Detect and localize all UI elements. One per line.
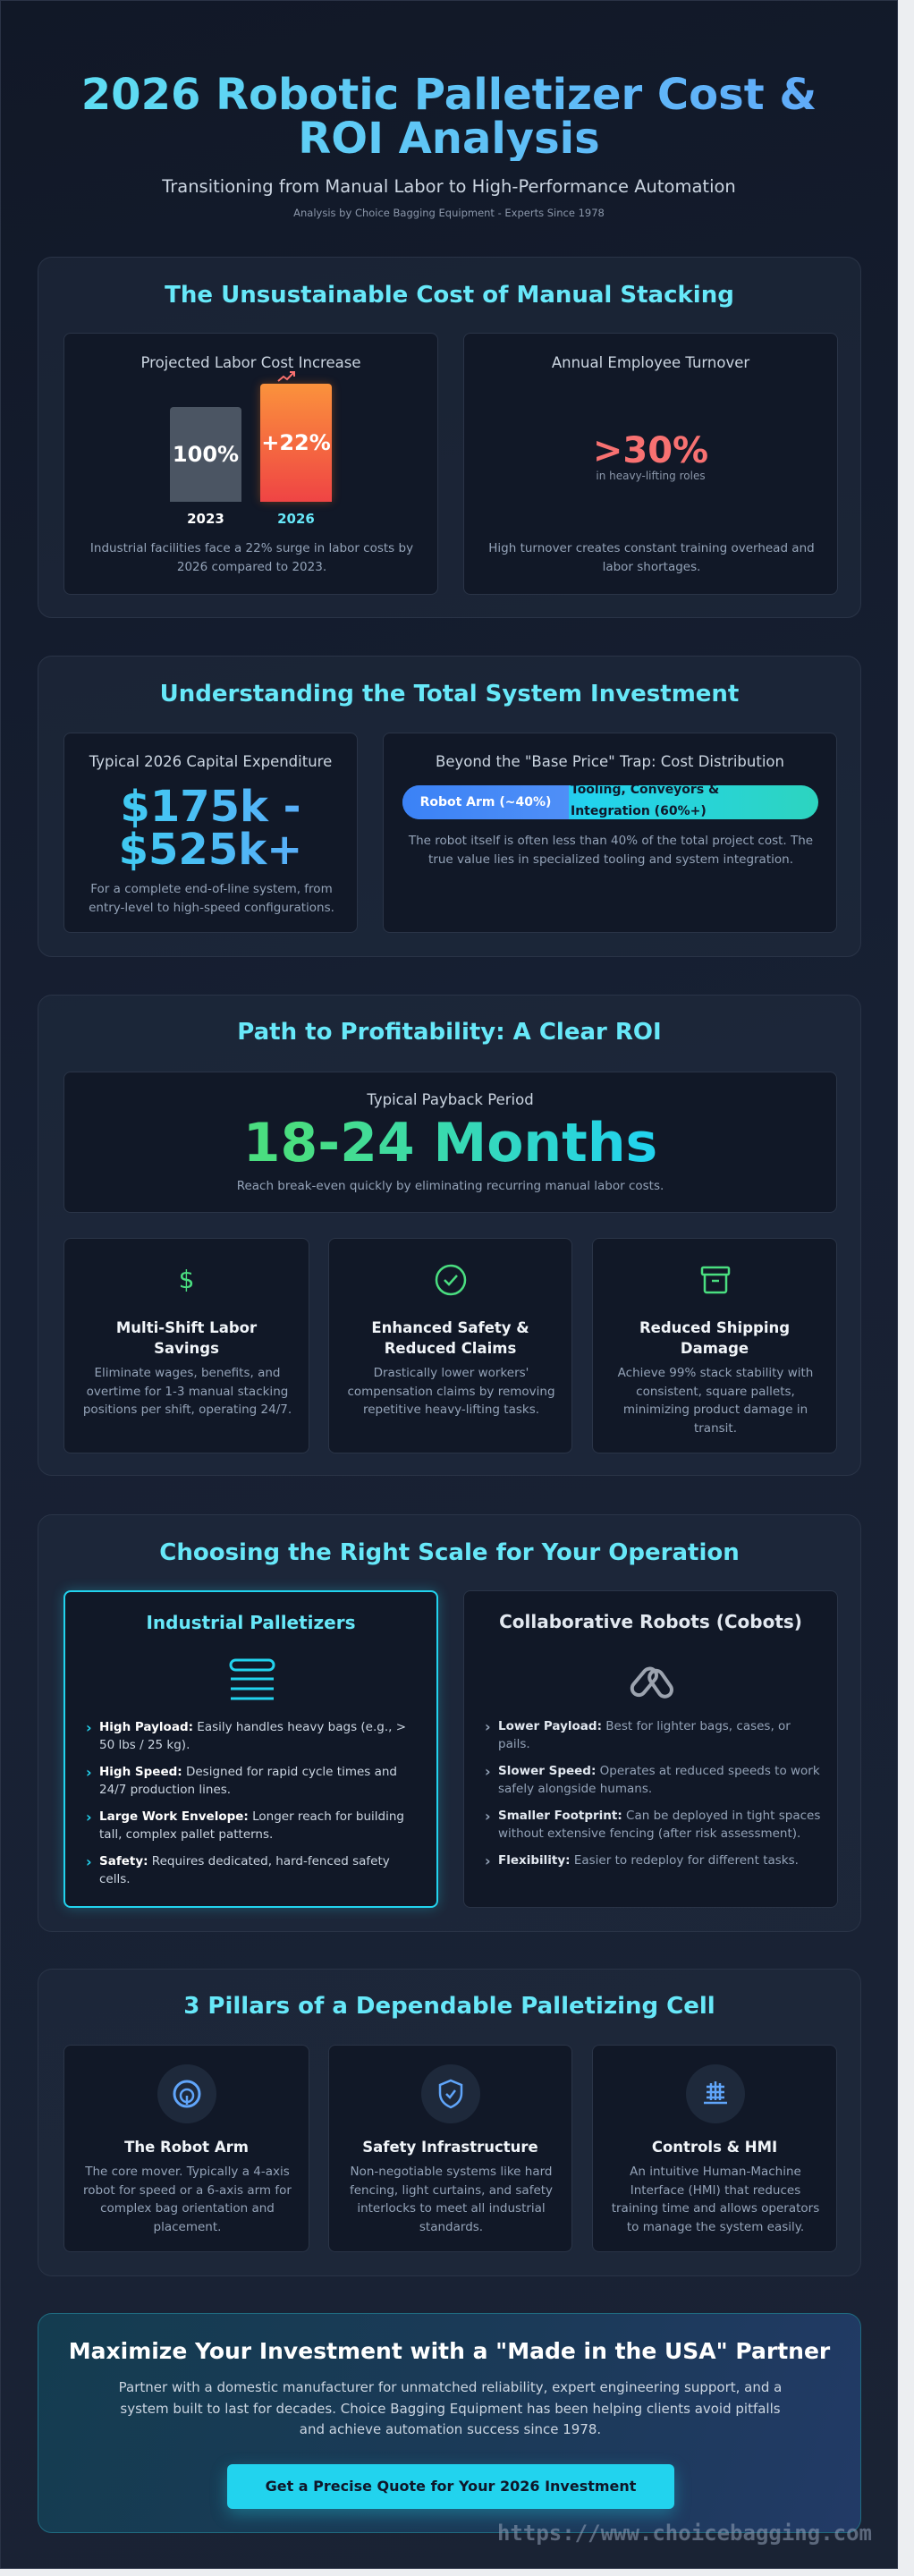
feature list: Smaller Footprint: Can be deployed in tight spaces without extensive fencing (after risk assessment).	[498, 1809, 820, 1841]
panel: total system investment	[38, 656, 861, 957]
panel: cost of manual stacking	[38, 257, 861, 618]
CTA paragraph: Partner with a domestic manufacturer for unmatched reliability, expert engineering support, and a system built to last for decades. Choice Bagging Equipment has been helping clients avoid pitfalls and achieve automation success since 1978.	[119, 2379, 782, 2437]
price range	[64, 785, 357, 871]
segment: tooling: Tooling, Conveyors & Integration (60%+)	[571, 783, 719, 818]
year labels	[187, 511, 315, 527]
segment: robot arm: Robot Arm (~40%)	[420, 795, 551, 809]
year labels: 2023	[187, 511, 224, 527]
stat caption: in heavy-lifting roles	[596, 470, 706, 482]
icon: robot arm	[157, 2064, 216, 2123]
heading: Understanding the Total System Investment	[160, 681, 739, 708]
bar 2026	[260, 384, 332, 502]
card: controls	[592, 2045, 837, 2252]
icon: shield	[421, 2064, 480, 2123]
icon: check circle	[435, 1265, 467, 1295]
card title: Projected Labor Cost Increase	[141, 354, 360, 371]
bar 2023: 100%	[173, 442, 239, 467]
description: Reach break-even quickly by eliminating recurring manual labor costs.	[237, 1179, 664, 1193]
feature list	[487, 1719, 820, 1868]
bar 2023	[170, 407, 241, 502]
heading: The Unsustainable Cost of Manual Stacking	[165, 282, 734, 309]
card: labor cost chart	[63, 333, 438, 595]
card: shipping damage	[592, 1238, 837, 1453]
card: safety infrastructure	[328, 2045, 572, 2252]
CTA button: Get a Precise Quote for Your 2026 Investment	[266, 2478, 636, 2495]
feature list: Lower Payload: Best for lighter bags, cases, or pails.	[498, 1719, 791, 1751]
card title: Typical 2026 Capital Expenditure	[89, 753, 332, 770]
stacked bar	[402, 785, 818, 819]
card: capex	[63, 733, 358, 933]
icon: cobot arm	[630, 1667, 673, 1699]
card: cost distribution	[383, 733, 837, 933]
icon: dollar: $	[179, 1265, 194, 1294]
icon: archive box	[701, 1267, 730, 1293]
heading: Choosing the Right Scale for Your Operation	[159, 1539, 740, 1566]
CTA panel	[38, 2313, 861, 2533]
subtitle: Transitioning from Manual Labor to High-Performance Automation	[162, 176, 736, 197]
watermark url: https://www.choicebagging.com	[497, 2521, 872, 2546]
description: Drastically lower workers' compensation claims by removing repetitive heavy-lifting tasks.	[347, 1366, 555, 1417]
card: robot arm	[63, 2045, 309, 2252]
bar 2026: +22%	[261, 430, 331, 455]
title: Controls & HMI	[652, 2139, 777, 2156]
title: Damage	[681, 1340, 749, 1357]
feature list	[88, 1720, 406, 1885]
title: Reduced Shipping	[639, 1319, 790, 1336]
card: payback	[63, 1072, 837, 1213]
icon: trend arrow	[277, 371, 295, 382]
card: industrial palletizers	[63, 1590, 438, 1908]
title: Safety Infrastructure	[362, 2139, 538, 2156]
panel: choosing scale	[38, 1514, 861, 1932]
segment: robot arm	[402, 785, 569, 819]
heading: Path to Profitability: A Clear ROI	[237, 1019, 662, 1046]
title: ROI Analysis	[298, 114, 600, 164]
title: Savings	[154, 1340, 219, 1357]
description: Achieve 99% stack stability with consistent, square pallets, minimizing product damage in transit.	[618, 1366, 813, 1435]
card title: Beyond the "Base Price" Trap: Cost Distribution	[436, 753, 784, 770]
card: turnover	[463, 333, 838, 595]
title: 2026 Robotic Palletizer Cost &	[81, 70, 817, 120]
feature list: Large Work Envelope: Longer reach for building tall, complex pallet patterns.	[99, 1809, 404, 1841]
description: High turnover creates constant training overhead and labor shortages.	[488, 541, 815, 574]
payback stat: 18-24 Months	[243, 1112, 657, 1174]
title	[116, 1319, 258, 1357]
description: Industrial facilities face a 22% surge in labor costs by 2026 compared to 2023.	[90, 541, 413, 574]
description: Eliminate wages, benefits, and overtime for 1-3 manual stacking positions per shift, operating 24/7.	[83, 1366, 292, 1417]
card title: Typical Payback Period	[367, 1091, 534, 1108]
panel: 3 pillars	[38, 1969, 861, 2276]
price range: $525k+	[119, 825, 302, 875]
feature list: Slower Speed: Operates at reduced speeds to work safely alongside humans.	[498, 1764, 820, 1796]
description: An intuitive Human-Machine Interface (HMI) that reduces training time and allows operators to manage the system easily.	[612, 2165, 819, 2234]
payback stat	[64, 1112, 836, 1174]
title	[371, 1319, 529, 1357]
heading: 3 Pillars of a Dependable Palletizing Cell	[183, 1993, 715, 2020]
title: Multi-Shift Labor	[116, 1319, 257, 1336]
icon: stack	[229, 1658, 275, 1699]
description: Non-negotiable systems like hard fencing, light curtains, and safety interlocks to meet all industrial standards.	[350, 2165, 553, 2234]
feature list: High Payload: Easily handles heavy bags (e.g., > 50 lbs / 25 kg).	[99, 1720, 406, 1751]
year labels: 2026	[277, 511, 315, 527]
CTA button	[227, 2464, 674, 2509]
CTA heading: Maximize Your Investment with a "Made in the USA" Partner	[69, 2338, 830, 2364]
card title: Collaborative Robots (Cobots)	[499, 1611, 802, 1632]
feature list: Flexibility: Easier to redeploy for different tasks.	[498, 1853, 799, 1868]
title	[639, 1319, 790, 1357]
card: labor savings	[63, 1238, 309, 1453]
price range: $175k -	[120, 782, 301, 832]
feature list: Safety: Requires dedicated, hard-fenced safety cells.	[99, 1854, 390, 1885]
stat: >30%	[593, 430, 708, 471]
card: safety	[328, 1238, 572, 1453]
description: For a complete end-of-line system, from entry-level to high-speed configurations.	[89, 882, 334, 914]
title: Enhanced Safety &	[371, 1319, 529, 1336]
card title: Annual Employee Turnover	[552, 354, 749, 371]
description: The robot itself is often less than 40% of the total project cost. The true value lies in specialized tooling and system integration.	[409, 834, 813, 866]
description: The core mover. Typically a 4-axis robot for speed or a 6-axis arm for complex bag orientation and placement.	[83, 2165, 292, 2234]
icon: controls	[686, 2064, 745, 2123]
title	[0, 73, 898, 161]
byline: Analysis by Choice Bagging Equipment - Experts Since 1978	[293, 207, 605, 219]
card title: Industrial Palletizers	[146, 1612, 356, 1633]
feature list: High Speed: Designed for rapid cycle times and 24/7 production lines.	[99, 1765, 397, 1796]
title: Reduced Claims	[385, 1340, 516, 1357]
card: cobots	[463, 1590, 838, 1908]
title: The Robot Arm	[124, 2139, 249, 2156]
panel: ROI	[38, 995, 861, 1476]
